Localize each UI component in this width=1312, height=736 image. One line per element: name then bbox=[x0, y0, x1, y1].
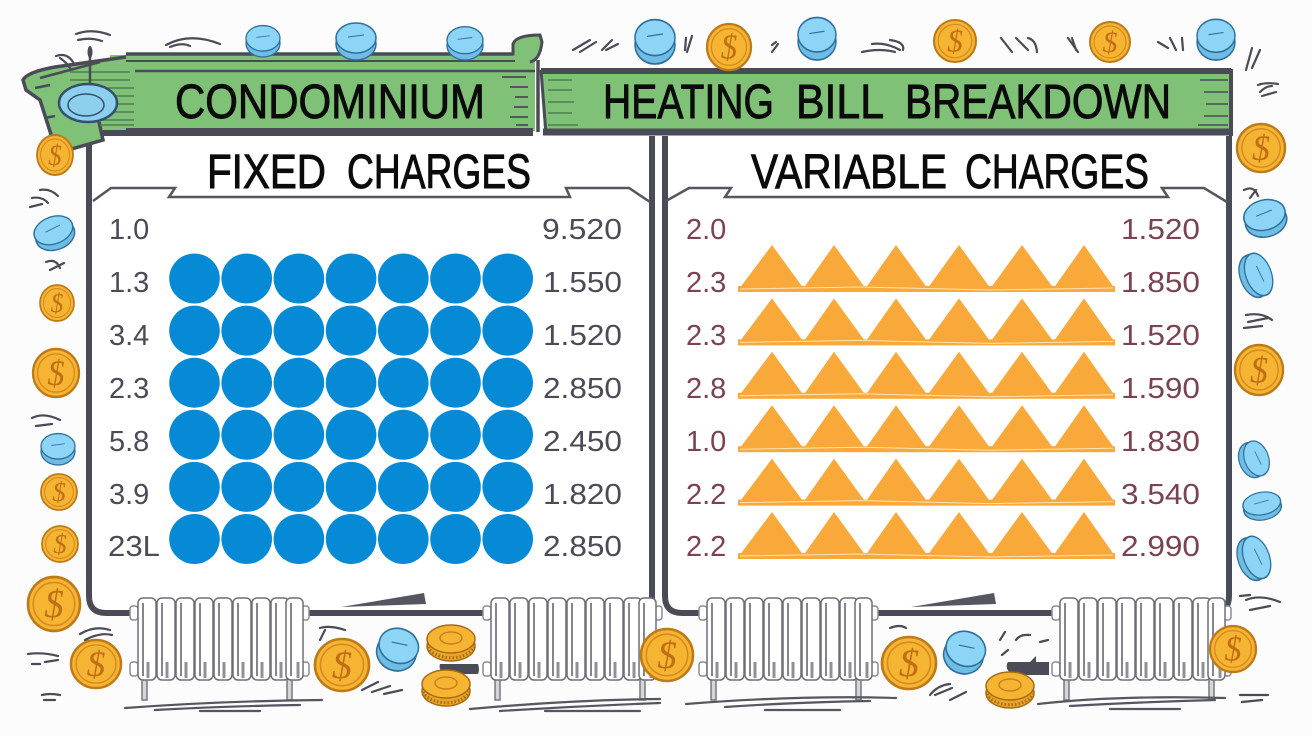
pill bbox=[1234, 249, 1278, 301]
coin bbox=[71, 640, 121, 688]
icon: pinned pill on banner bbox=[59, 46, 117, 122]
variable charges right values: 2.990 bbox=[1121, 531, 1200, 563]
fixed charges right values: 2.850 bbox=[543, 531, 622, 563]
coin: $ bbox=[47, 353, 65, 393]
variable charges right values: 1.520 bbox=[1121, 214, 1200, 246]
fixed charges right values bbox=[542, 214, 622, 563]
fixed charges left labels bbox=[108, 214, 160, 563]
coin bbox=[42, 526, 78, 562]
heading: variable charges bbox=[751, 146, 1149, 199]
pill bbox=[938, 626, 990, 679]
coin: $ bbox=[1252, 128, 1270, 168]
coin: $ bbox=[1102, 26, 1118, 59]
coin: $ bbox=[947, 23, 963, 59]
coin: $ bbox=[657, 634, 677, 677]
floor shadow strokes bbox=[125, 697, 1225, 711]
pill bbox=[1232, 532, 1276, 584]
fixed charges left labels: 3.4 bbox=[109, 320, 149, 352]
variable charges right values: 1.590 bbox=[1121, 373, 1200, 405]
panel: variable charges frame bbox=[665, 136, 1229, 613]
coin bbox=[641, 629, 693, 681]
pill bbox=[1241, 489, 1283, 523]
coin: $ bbox=[52, 477, 66, 507]
coin bbox=[934, 20, 976, 62]
variable charges left labels: 1.0 bbox=[686, 426, 726, 458]
fixed charges right values: 1.820 bbox=[543, 479, 622, 511]
coin stack bbox=[986, 672, 1034, 708]
coin bbox=[41, 474, 77, 510]
pill bbox=[447, 27, 483, 60]
coin: $ bbox=[332, 644, 352, 687]
fixed charges right values: 2.850 bbox=[543, 373, 622, 405]
variable charges right values: 3.540 bbox=[1121, 479, 1200, 511]
coin bbox=[33, 349, 79, 397]
variable charges right values: 1.520 bbox=[1121, 320, 1200, 352]
variable charges left labels: 2.0 bbox=[686, 214, 726, 246]
variable charges left labels bbox=[686, 214, 726, 563]
variable charges left labels: 2.3 bbox=[686, 320, 726, 352]
fixed charges left labels: 2.3 bbox=[109, 373, 149, 405]
coin bbox=[1210, 626, 1256, 672]
title: heating bill breakdown bbox=[603, 76, 1171, 129]
chart: fixed charges circle grid bbox=[169, 254, 533, 564]
coin: $ bbox=[899, 642, 919, 685]
variable charges left labels: 2.3 bbox=[686, 267, 726, 299]
fixed charges left labels: 23L bbox=[108, 531, 160, 563]
coin stack bbox=[427, 625, 475, 661]
coin: $ bbox=[44, 582, 64, 627]
coin: $ bbox=[51, 288, 63, 318]
coin bbox=[37, 135, 73, 175]
variable charges left labels: 2.8 bbox=[686, 373, 726, 405]
coin: $ bbox=[87, 644, 105, 684]
fixed charges right values: 9.520 bbox=[542, 214, 622, 246]
pill bbox=[1240, 195, 1290, 242]
fixed charges heading divider bbox=[93, 188, 650, 202]
icon: radiator 3 bbox=[699, 598, 878, 700]
title: heating bill breakdown: HEATING bbox=[603, 76, 774, 129]
heading: fixed charges: CHARGES bbox=[347, 146, 531, 199]
icon: radiator 2 bbox=[483, 598, 662, 700]
variable charges right values bbox=[1121, 214, 1200, 563]
pill bbox=[798, 17, 836, 60]
fixed charges left labels: 1.3 bbox=[109, 267, 149, 299]
banner: condominium bbox=[23, 35, 542, 152]
fixed charges right values: 1.550 bbox=[543, 267, 622, 299]
title: heating bill breakdown: BILL bbox=[796, 76, 884, 129]
pill bbox=[246, 26, 280, 57]
radiators bbox=[130, 598, 1231, 700]
coin: $ bbox=[721, 29, 737, 67]
pill bbox=[336, 23, 376, 60]
variable charges right values: 1.830 bbox=[1121, 426, 1200, 458]
title: condominium: CONDOMINIUM bbox=[175, 76, 485, 129]
coin: $ bbox=[1224, 630, 1242, 668]
wedge hatch strokes bbox=[341, 593, 996, 607]
pill bbox=[1197, 19, 1235, 60]
dark blobs under coins bbox=[440, 656, 1049, 675]
chart: variable charges triangle grid bbox=[738, 245, 1115, 559]
coin: $ bbox=[1250, 349, 1268, 391]
fixed charges left labels: 5.8 bbox=[109, 426, 149, 458]
fixed charges left labels: 3.9 bbox=[109, 479, 149, 511]
coin bbox=[1235, 345, 1283, 395]
fixed charges right values: 1.520 bbox=[543, 320, 622, 352]
icon: radiator 1 bbox=[130, 598, 309, 700]
variable charges heading divider bbox=[666, 188, 1227, 202]
coin bbox=[707, 24, 751, 70]
heading: variable charges: VARIABLE bbox=[751, 146, 947, 199]
pill bbox=[635, 20, 675, 64]
variable charges left labels: 2.2 bbox=[686, 479, 726, 511]
panel: fixed charges frame bbox=[89, 136, 652, 613]
coin bbox=[1237, 124, 1285, 172]
pill bbox=[30, 211, 79, 256]
title: heating bill breakdown: BREAKDOWN bbox=[905, 76, 1171, 129]
fixed charges left labels: 1.0 bbox=[109, 214, 149, 246]
variable charges right values: 1.850 bbox=[1121, 267, 1200, 299]
heading: fixed charges: FIXED bbox=[207, 146, 326, 199]
variable charges left labels: 2.2 bbox=[686, 531, 726, 563]
coin bbox=[882, 637, 936, 689]
pill bbox=[371, 623, 423, 676]
coin: $ bbox=[48, 140, 62, 172]
coin bbox=[315, 639, 369, 691]
coin: $ bbox=[53, 529, 67, 559]
coin stack bbox=[422, 670, 470, 706]
pill bbox=[1234, 437, 1274, 481]
fixed charges right values: 2.450 bbox=[543, 426, 622, 458]
heading: fixed charges bbox=[207, 146, 531, 199]
banner: heating bill breakdown bbox=[541, 69, 1231, 136]
pill bbox=[41, 434, 75, 465]
coin bbox=[40, 285, 74, 321]
coin bbox=[1090, 22, 1130, 62]
heading: variable charges: CHARGES bbox=[965, 146, 1149, 199]
icon: radiator 4 bbox=[1052, 598, 1231, 700]
coin bbox=[28, 577, 80, 631]
